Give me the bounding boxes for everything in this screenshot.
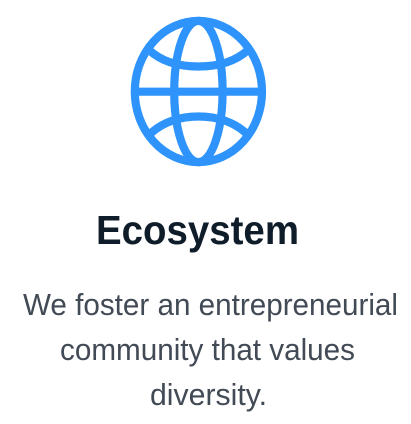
description text: community that values	[60, 332, 355, 367]
description text: We foster an entrepreneurial	[23, 287, 398, 322]
title: Ecosystem	[96, 207, 299, 253]
description text: diversity.	[150, 377, 267, 412]
icon: globe	[134, 21, 262, 162]
description text	[23, 287, 398, 412]
